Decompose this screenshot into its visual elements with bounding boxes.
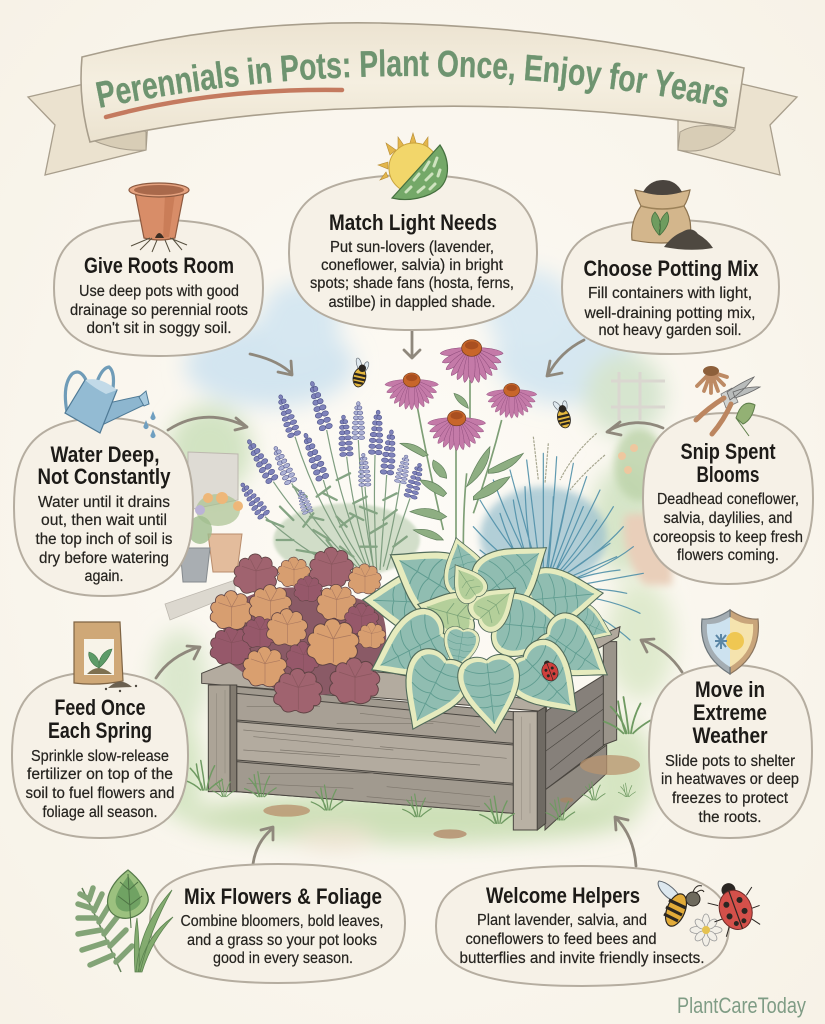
arrow: potting mix (547, 340, 584, 376)
title: Perennials in Pots: Plant Once, Enjoy for Years (96, 49, 728, 108)
panel: Give Roots Room: Use deep pots with good (79, 283, 239, 300)
coneflowers (385, 340, 537, 547)
panel: Match Light Needs: coneflower, salvia) in bright (321, 257, 504, 274)
heuchera foliage (210, 547, 386, 713)
icon: watering can (65, 367, 156, 438)
icon: bee, daisy and ladybug (658, 875, 766, 946)
panel: Mix Flowers & Foliage (150, 864, 405, 983)
panel: Move in Extreme Weather: Move in (695, 677, 765, 702)
background garden shelf and pots (165, 452, 243, 620)
icon: terracotta pot with roots (129, 183, 189, 252)
panel: Match Light Needs (289, 175, 537, 330)
icon: pruners and spent flower (696, 366, 760, 436)
arrow: water (168, 417, 247, 430)
illustration: planter with plants (185, 340, 650, 839)
icon: fern, hosta leaf and grass (78, 870, 173, 972)
bees in flight (351, 358, 573, 429)
panel: Mix Flowers & Foliage: Combine bloomers, bold leaves, (180, 913, 384, 930)
panel: Move in Extreme Weather: Extreme (693, 700, 767, 725)
panel: Water Deep, Not Constantly: Not Constantly (38, 464, 171, 489)
panel: Give Roots Room: Give Roots Room (84, 253, 234, 278)
panel: Match Light Needs: Put sun-lovers (lavender, (330, 239, 494, 256)
banner right tail (678, 84, 797, 175)
banner body (81, 23, 744, 142)
panel: Water Deep, Not Constantly: Water until it drains (38, 494, 170, 511)
panel: Water Deep, Not Constantly: dry before watering (39, 550, 169, 567)
panel: Water Deep, Not Constantly: the top inch of soil is (36, 531, 173, 548)
panel: Choose Potting Mix: Fill containers with light, (588, 285, 752, 302)
arrow: snip (607, 422, 663, 435)
panel: Feed Once Each Spring: soil to fuel flowers and (26, 785, 174, 802)
blue fescue grass (473, 433, 643, 640)
panel: Feed Once Each Spring: Sprinkle slow-release (31, 748, 169, 765)
panel: Choose Potting Mix: well-draining potting mix, (583, 305, 756, 322)
arrow: helpers (615, 817, 636, 866)
panel: Mix Flowers & Foliage: good in every season. (213, 950, 353, 967)
panel: Feed Once Each Spring (12, 672, 188, 838)
arrow: move (641, 639, 682, 672)
arrow: mix (253, 827, 273, 864)
illustration: watercolor backdrop (152, 270, 674, 850)
title banner (26, 22, 798, 176)
panel: Snip Spent Blooms: salvia, daylilies, and (664, 510, 792, 527)
panel: Choose Potting Mix: not heavy garden soil. (598, 322, 742, 339)
icon: weather shield (702, 610, 758, 674)
arrow: roots (250, 354, 292, 375)
panel: Move in Extreme Weather: Weather (692, 723, 768, 748)
panel: Snip Spent Blooms: Blooms (696, 462, 760, 487)
panel: Match Light Needs: spots; shade fans (hosta, ferns, (310, 275, 514, 292)
panel: Water Deep, Not Constantly: Water Deep, (50, 442, 160, 467)
panel: Match Light Needs: Match Light Needs (329, 210, 497, 235)
ladybug (704, 875, 766, 939)
panel: Welcome Helpers (436, 866, 729, 986)
panel: Feed Once Each Spring: Each Spring (48, 718, 152, 743)
arrow: feed (156, 646, 200, 678)
arrows pointing to the planter (156, 331, 682, 866)
panel: Feed Once Each Spring: fertilizer on top of the (27, 766, 173, 783)
wooden planter box (202, 627, 620, 830)
panel: Welcome Helpers: Plant lavender, salvia, and (477, 912, 647, 929)
panel: Snip Spent Blooms (643, 413, 813, 584)
panel: Mix Flowers & Foliage: and a grass so your pot looks (187, 932, 377, 949)
panel: Snip Spent Blooms: flowers coming. (677, 547, 779, 564)
hosta foliage (356, 523, 625, 743)
panel: Match Light Needs: astilbe) in dappled shade. (328, 294, 496, 311)
panel: Snip Spent Blooms: Snip Spent (680, 439, 776, 464)
panel: Move in Extreme Weather: freezes to protect (672, 790, 789, 807)
panel: Move in Extreme Weather: in heatwaves or deep (661, 771, 799, 788)
icon: sun and leaf (378, 133, 448, 200)
panel: Feed Once Each Spring: foliage all season. (42, 804, 158, 821)
icon: fertilizer bag (74, 622, 137, 692)
panel: Give Roots Room: drainage so perennial roots (70, 302, 248, 319)
panel: Feed Once Each Spring: Feed Once (54, 695, 146, 720)
banner left tail (28, 84, 148, 175)
background trellis and terracotta (611, 372, 672, 585)
panel: Choose Potting Mix (562, 220, 779, 354)
daisy (690, 914, 722, 946)
panel: Water Deep, Not Constantly (14, 418, 193, 596)
panel: Move in Extreme Weather: Slide pots to shelter (665, 753, 795, 770)
panel: Choose Potting Mix: Choose Potting Mix (584, 256, 759, 281)
ladybug on hosta leaf (538, 658, 561, 683)
panel: Snip Spent Blooms: coreopsis to keep fresh (653, 529, 803, 546)
panel: Welcome Helpers: butterflies and invite friendly insects. (460, 950, 704, 967)
panel: Give Roots Room: don't sit in soggy soil. (86, 320, 232, 337)
panel: Welcome Helpers: coneflowers to feed bees and (466, 931, 656, 948)
lavender plant (236, 380, 427, 577)
panel: Welcome Helpers: Welcome Helpers (486, 883, 640, 908)
bee (658, 881, 704, 929)
title underline (106, 90, 342, 117)
panel: Move in Extreme Weather (649, 665, 812, 838)
panel: Water Deep, Not Constantly: again. (84, 568, 124, 585)
arrow: light (404, 331, 420, 358)
watercolor sky and foliage washes (152, 270, 674, 850)
panel: Move in Extreme Weather: the roots. (698, 809, 762, 826)
icon: potting mix bag (632, 180, 713, 250)
panel: Give Roots Room (54, 220, 263, 356)
panel: Snip Spent Blooms: Deadhead coneflower, (657, 491, 799, 508)
grass tufts and soil (185, 697, 650, 839)
panel: Water Deep, Not Constantly: out, then wait until (41, 512, 167, 529)
panel: Mix Flowers & Foliage: Mix Flowers & Foliage (184, 884, 382, 909)
